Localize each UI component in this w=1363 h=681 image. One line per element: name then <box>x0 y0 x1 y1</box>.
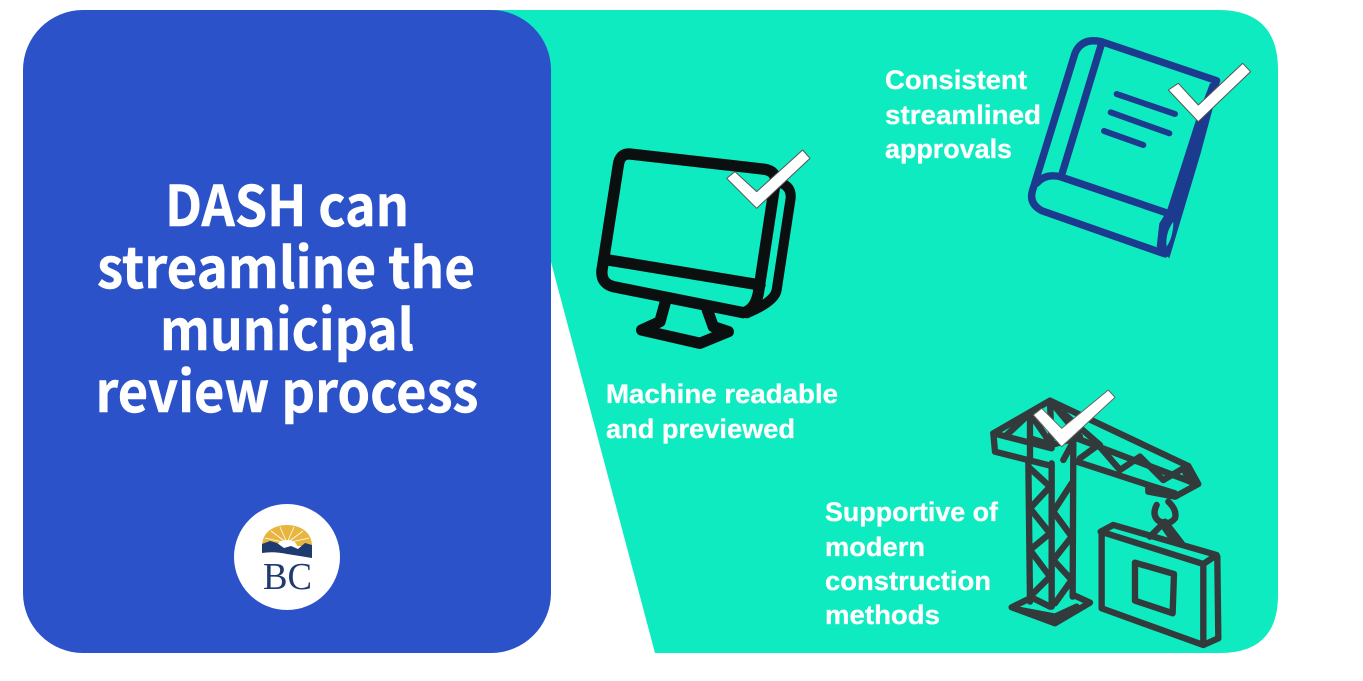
text: Consistent streamlined approvals: streamlined <box>885 100 1041 130</box>
icon: computer monitor with check <box>602 150 810 343</box>
icon: BC logo: BC <box>263 556 312 598</box>
text: Consistent streamlined approvals: Consistent <box>885 65 1027 95</box>
heading: DASH can streamline the municipal review process: municipal <box>160 286 414 367</box>
text: Supportive of modern construction methods: methods <box>825 600 940 630</box>
text: Machine readable and previewed: Machine readable <box>606 379 838 409</box>
icon: BC logo <box>234 504 340 610</box>
text: Consistent streamlined approvals <box>885 65 1041 164</box>
text: Supportive of modern construction methods: modern <box>825 532 925 562</box>
panel: teal benefits background <box>480 10 1278 653</box>
icon: book with check <box>1032 41 1251 258</box>
text: Supportive of modern construction methods: construction <box>825 566 991 596</box>
text: Machine readable and previewed: and previewed <box>606 414 795 444</box>
text: Consistent streamlined approvals: approvals <box>885 134 1012 164</box>
text: Supportive of modern construction methods: Supportive of <box>825 497 999 527</box>
heading: DASH can streamline the municipal review process <box>96 162 478 429</box>
text: Supportive of modern construction methods <box>825 497 999 630</box>
heading: DASH can streamline the municipal review process: review process <box>96 348 478 429</box>
text: Machine readable and previewed <box>606 379 838 444</box>
heading: DASH can streamline the municipal review process: streamline the <box>97 224 475 305</box>
icon: construction crane with check <box>993 390 1218 645</box>
panel: blue title panel <box>23 10 551 653</box>
heading: DASH can streamline the municipal review process: DASH can <box>165 162 409 243</box>
